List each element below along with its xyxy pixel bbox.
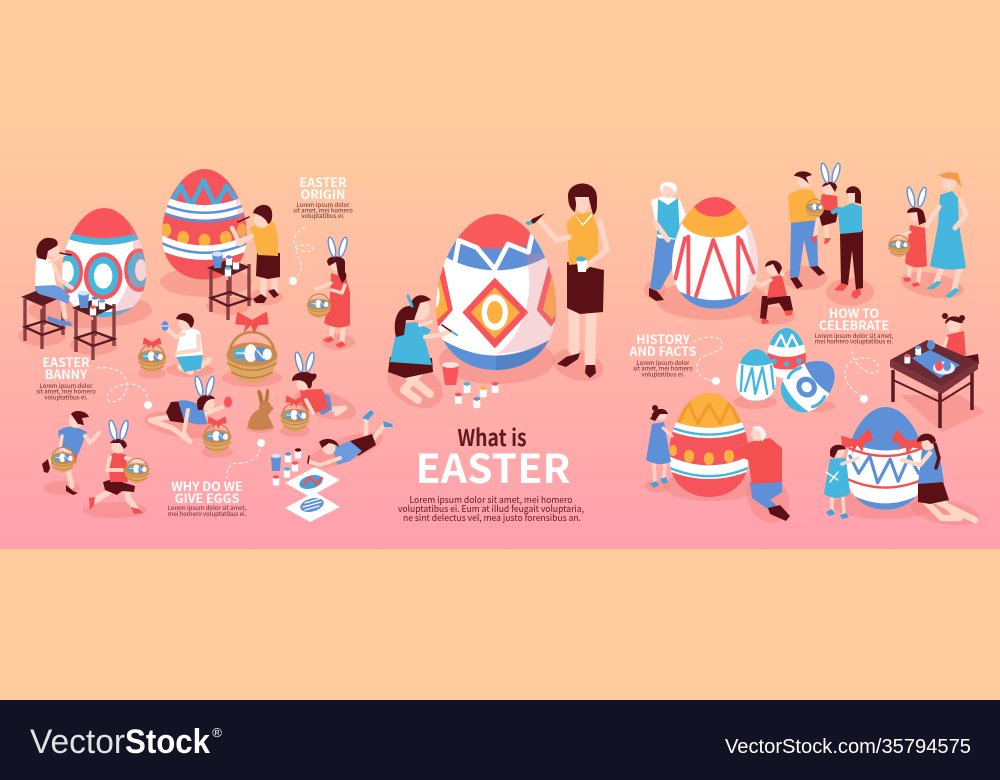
paint bottles xyxy=(455,382,499,408)
woman in dress xyxy=(926,172,966,298)
bunny ears xyxy=(327,237,349,257)
grandfather xyxy=(649,182,686,301)
callout: easter origin xyxy=(293,172,353,220)
woman kneeling xyxy=(902,434,975,520)
girl in teal dress xyxy=(824,445,858,519)
central scene: painting giant egg xyxy=(379,184,607,417)
child on stool xyxy=(35,238,72,326)
egg xyxy=(224,396,232,408)
scene: family with child on arms xyxy=(783,163,874,306)
father xyxy=(788,171,825,289)
callout: history and facts xyxy=(629,329,697,378)
kneeling boy xyxy=(162,313,209,372)
footer logo: Vector xyxy=(30,723,125,761)
body text: voluptatibus ei. xyxy=(44,392,88,402)
title: EASTER: EASTER xyxy=(416,437,570,495)
body text: voluptatibus ei. xyxy=(641,370,685,378)
body text: Lorem ipsum dolor xyxy=(636,358,690,367)
basket xyxy=(51,447,75,472)
body text: sit amet, mei homero xyxy=(36,386,96,396)
child xyxy=(806,163,842,244)
egg: red with stripes xyxy=(162,169,247,280)
gradient poster panel xyxy=(0,0,1000,549)
basket xyxy=(138,345,166,373)
stools xyxy=(21,288,64,349)
giant egg xyxy=(436,214,556,370)
boy in red xyxy=(754,260,793,324)
footer url: VectorStock.com/35794575 xyxy=(725,736,971,758)
crawling child with egg and basket xyxy=(142,376,233,458)
woman painting xyxy=(526,184,607,378)
scene: girl with basket and bunny ears xyxy=(307,237,355,350)
scene: woman in blue dress and girl with basket xyxy=(888,172,966,302)
scene: boy painting red egg xyxy=(158,166,283,320)
paper with striped egg xyxy=(285,492,340,522)
body text: voluptatibus ei. xyxy=(301,211,345,220)
body text: Lorem ipsum dolor xyxy=(296,200,350,209)
egg: white with rings xyxy=(62,208,146,318)
heading: CELEBRATE xyxy=(819,315,889,334)
egg: orange cap red zigzag xyxy=(672,197,758,309)
basket xyxy=(281,403,309,432)
bunny ears xyxy=(194,376,216,396)
large basket with bow xyxy=(222,312,282,387)
red paint cup xyxy=(442,362,459,385)
bunny ears xyxy=(906,187,928,207)
bows xyxy=(839,428,876,457)
running boy with basket xyxy=(42,411,99,495)
heading: HOW TO xyxy=(829,303,879,322)
dotted arrow: celebrate xyxy=(845,351,878,403)
registered mark: ® xyxy=(212,725,222,740)
bunny ears xyxy=(294,352,316,372)
scene: two girls hugging blue egg xyxy=(824,403,982,530)
scene: grandfather and boy with egg xyxy=(644,182,795,325)
body text: sit amet, mei homero xyxy=(293,206,353,214)
dotted arrow: origin xyxy=(289,227,313,285)
footer logo: Stock xyxy=(125,723,210,761)
body text: mei homero voluptatibus ei. xyxy=(168,509,247,518)
egg: blue top zigzag xyxy=(846,407,922,510)
girl painting xyxy=(388,295,457,400)
bow xyxy=(143,337,161,350)
table xyxy=(890,340,978,428)
teal egg xyxy=(736,349,776,401)
painting boy xyxy=(232,205,280,303)
girl at table xyxy=(934,313,979,367)
basket xyxy=(125,458,149,483)
heading: AND FACTS xyxy=(629,341,697,360)
title: What is: What is xyxy=(458,419,526,453)
heading: ORIGIN xyxy=(301,184,345,203)
striped egg xyxy=(767,328,806,378)
bow xyxy=(235,312,269,334)
heading: GIVE EGGS xyxy=(175,488,240,507)
scene: girl and grandfather with striped egg xyxy=(644,393,790,523)
stool with paint xyxy=(207,259,250,320)
heading: WHY DO WE xyxy=(171,476,243,495)
body text: Lorem ipsum dolor sit amet, xyxy=(168,503,247,512)
paper with egg drawing xyxy=(285,467,340,497)
body text: Lorem ipsum dolor sit amet, xyxy=(815,331,894,340)
scene: kneeling boy with small basket xyxy=(138,313,214,379)
girl with basket xyxy=(888,187,928,287)
bow xyxy=(207,416,227,429)
table items xyxy=(904,340,955,374)
body text: Lorem ipsum dolor xyxy=(39,381,93,390)
rabbit xyxy=(246,389,274,433)
bunny ears xyxy=(820,163,842,183)
girl in blue dress xyxy=(646,405,672,488)
heading: HISTORY xyxy=(636,329,691,348)
mother xyxy=(833,186,863,299)
basket xyxy=(806,199,824,218)
paint pots xyxy=(78,290,105,316)
grandfather in red xyxy=(733,426,790,521)
bunny ears xyxy=(108,420,130,440)
body text: mei homero voluptatibus ei. xyxy=(815,336,894,346)
central body text: voluptatibus ei. Eum at illud feugait voluptaria, xyxy=(398,502,584,515)
basket xyxy=(307,294,331,318)
central body text: ne sint delectus vel, mea justo forensibus an. xyxy=(403,511,581,524)
scene: table with painting girl xyxy=(890,313,985,432)
dotted arrow: history xyxy=(693,337,722,385)
blue ring egg xyxy=(780,360,835,412)
body text: sit amet, mei homero xyxy=(633,364,693,372)
dotted arrow: eggs xyxy=(227,439,265,479)
callout: easter banny xyxy=(36,352,96,402)
basket xyxy=(888,235,910,257)
bow xyxy=(285,395,305,408)
central body text: Lorem ipsum dolor sit amet, mei homero xyxy=(409,493,572,506)
footer bar xyxy=(0,700,1000,780)
crawling girl with basket xyxy=(280,352,359,437)
egg: orange top striped xyxy=(669,393,748,497)
heading: EASTER xyxy=(299,172,347,191)
paint pots xyxy=(212,252,239,276)
dotted arrow: banny xyxy=(97,368,152,409)
paint pots xyxy=(271,448,301,486)
lying child with paints and paper xyxy=(271,410,393,522)
running child with bunny ears xyxy=(83,420,149,518)
heading: BANNY xyxy=(45,364,88,383)
basket xyxy=(203,424,231,453)
callout: how to celebrate xyxy=(815,303,894,346)
scene: child painting white egg on stool xyxy=(18,204,154,360)
three decorated eggs xyxy=(733,328,836,412)
callout: why do we give eggs xyxy=(168,476,247,518)
heading: EASTER xyxy=(42,352,90,371)
